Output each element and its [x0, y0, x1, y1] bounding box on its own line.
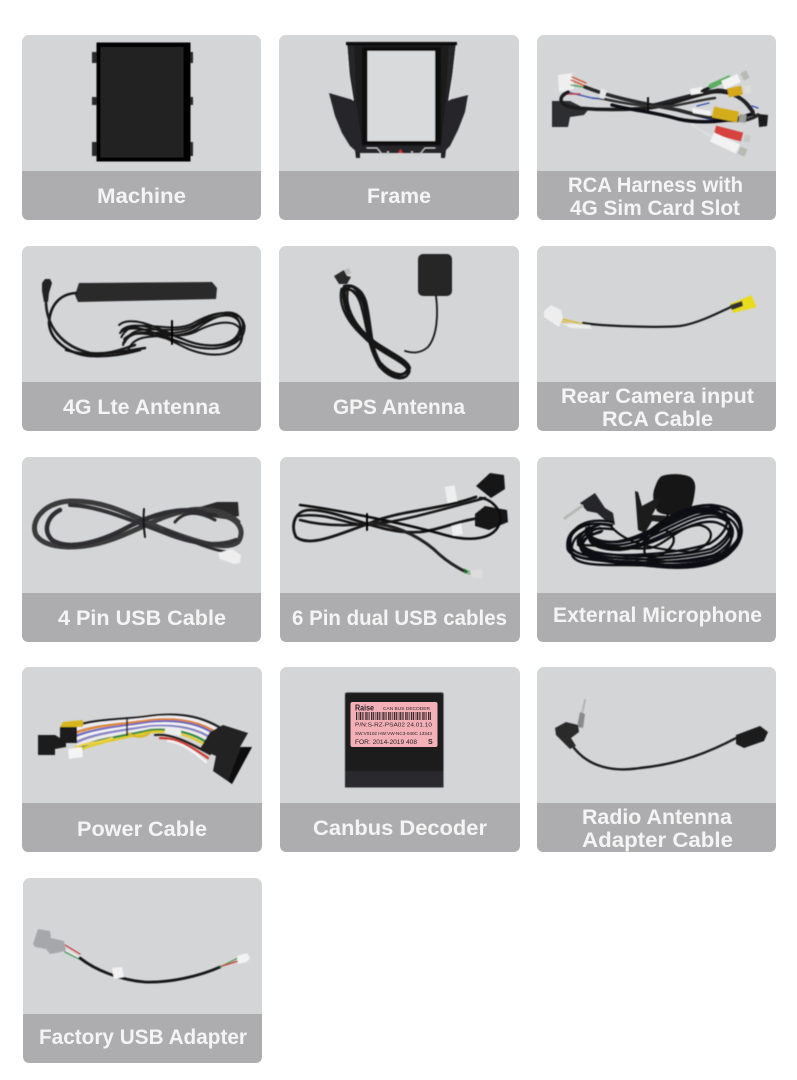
label: decoder sticker: CAN BUS DECODER — [383, 706, 431, 711]
panel: Rear Camera input RCA Cable: RCA Cable — [602, 408, 713, 431]
label: decoder sticker — [350, 702, 438, 747]
panel: 4G Lte Antenna — [22, 246, 261, 431]
panel: 6 Pin dual USB cables — [280, 457, 520, 642]
panel: RCA Harness with 4G Sim Card Slot — [537, 35, 776, 220]
panel: Radio Antenna Adapter Cable: Adapter Cable — [582, 829, 733, 852]
panel: Factory USB Adapter: Factory USB Adapter — [39, 1026, 247, 1049]
panel: 4 Pin USB Cable: 4 Pin USB Cable — [58, 607, 226, 630]
panel: Radio Antenna Adapter Cable: Radio Antenna — [582, 806, 732, 829]
panel: External Microphone — [537, 457, 776, 642]
icon: 4G antenna — [42, 279, 246, 357]
panel: External Microphone: External Microphone — [553, 604, 762, 627]
label: decoder sticker: S — [428, 739, 433, 746]
panel: Factory USB Adapter — [23, 878, 262, 1063]
panel: Machine — [22, 35, 261, 220]
icon: radio antenna adapter — [555, 700, 768, 769]
icon: GPS antenna — [334, 254, 452, 378]
icon: dash frame — [329, 42, 468, 158]
icon: power cable harness — [38, 715, 252, 784]
panel: Power Cable: Power Cable — [77, 818, 207, 841]
panel: Power Cable — [22, 667, 262, 852]
icon: RCA plugs — [692, 74, 751, 153]
icon: microphone with clip and jack — [565, 474, 743, 571]
panel: Rear Camera input RCA Cable: Rear Camera input — [561, 385, 754, 408]
icon: rear camera RCA cable — [544, 295, 762, 329]
icon: 4 pin USB cable — [34, 501, 241, 564]
panel: 4 Pin USB Cable — [22, 457, 261, 642]
panel: Frame — [279, 35, 519, 220]
icon: 6 pin dual USB cables — [294, 473, 508, 578]
panel: GPS Antenna — [279, 246, 519, 431]
panel: Canbus Decoder: Canbus Decoder — [313, 817, 487, 840]
label: decoder sticker: P/N:S-RZ-PSA02 24.01.10 — [355, 722, 432, 728]
label: decoder sticker: Raise — [355, 704, 374, 712]
panel: Rear Camera input RCA Cable — [537, 246, 776, 431]
panel: Canbus Decoder — [280, 667, 520, 852]
panel: 4G Lte Antenna: 4G Lte Antenna — [63, 396, 220, 419]
panel: Frame: Frame — [367, 185, 431, 208]
panel: Radio Antenna Adapter Cable — [537, 667, 776, 852]
panel: 6 Pin dual USB cables: 6 Pin dual USB cables — [292, 607, 507, 630]
panel: RCA Harness with 4G Sim Card Slot: RCA Harness with — [568, 174, 743, 197]
icon: machine screen — [92, 42, 193, 162]
panel: RCA Harness with 4G Sim Card Slot: 4G Sim Card Slot — [570, 197, 740, 220]
panel: Machine: Machine — [97, 185, 186, 208]
label: decoder sticker: FOR: 2014-2019 408 — [355, 740, 418, 746]
icon: RCA harness — [552, 73, 768, 153]
icon: factory USB adapter — [33, 929, 250, 982]
label: decoder sticker: SW:V0102 HW:VW-NC3-040C 13343 — [355, 731, 432, 736]
icon: canbus decoder box — [345, 692, 444, 788]
icon: black cable bundle — [561, 87, 768, 127]
panel: GPS Antenna: GPS Antenna — [333, 396, 465, 419]
